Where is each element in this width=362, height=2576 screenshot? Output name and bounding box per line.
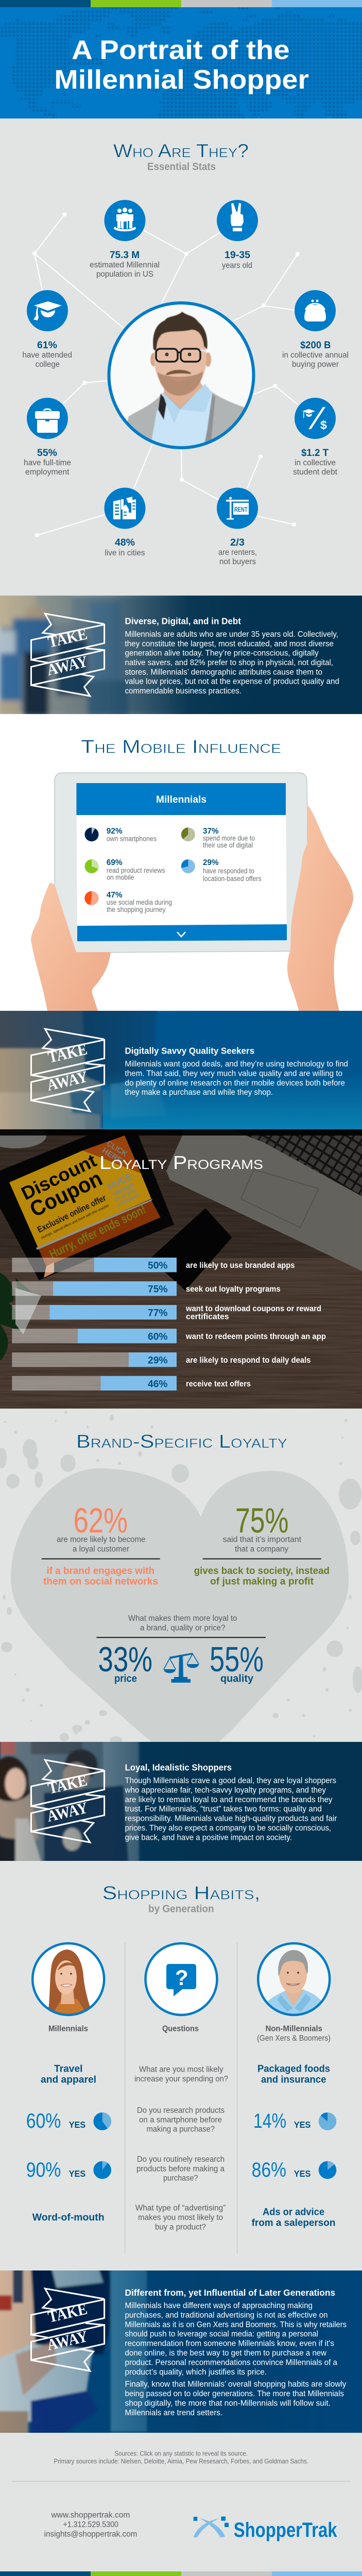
coupon tablet: savings, special offers and more with this voucher	[41, 1204, 110, 1240]
takeaway ribbon: AWAY	[45, 2327, 90, 2354]
stat: 75% gives back: that a company	[235, 1545, 288, 1554]
takeaway ribbon	[31, 2289, 105, 2371]
bar: 50%: 50%	[148, 1261, 168, 1272]
plant	[0, 1273, 33, 1360]
laptop	[166, 1129, 362, 1271]
heading: who are they	[113, 140, 249, 173]
bar: 60%: want to redeem points through an app	[185, 1332, 326, 1341]
contact details: insights@shoppertrak.com	[44, 2530, 137, 2538]
coupon tablet	[0, 1136, 174, 1280]
coupon tablet: on all your	[113, 1187, 138, 1203]
stat: 14% yes: YES	[294, 2120, 311, 2130]
stat: cities: live in cities	[105, 549, 145, 557]
stat: age: 19-35	[225, 250, 250, 261]
takeaway text: native savers, and 82% prefer to shop in physical, not digital,	[125, 658, 333, 667]
screen footer bar with chevron	[77, 924, 287, 941]
ears	[150, 352, 155, 367]
icon: balance scale	[164, 1653, 199, 1683]
takeaway text: Digitally Savvy Quality Seekers	[125, 1046, 254, 1056]
takeaway text: Millennials are adults who are under 35 years old. Collectively,	[125, 630, 338, 639]
mouse	[0, 1136, 46, 1148]
stat: 90% yes	[26, 2159, 111, 2181]
takeaway text: Millennials as it is on Gen Xers and Boomers. This is why retailers	[125, 2320, 347, 2329]
shirt	[151, 384, 213, 446]
wood desk	[0, 1129, 362, 1409]
takeaway text: Millennials want good deals, and they’re using technology to find	[125, 1060, 348, 1069]
panel: takeaway 1	[0, 590, 362, 716]
stat: population: 75.3 M	[110, 250, 140, 261]
stat: 62% social: are more likely to become	[57, 1535, 145, 1544]
pie: 69% reviews: read product reviews	[107, 867, 165, 874]
takeaway text: being passed on to older generations. The more that Millennials	[125, 2389, 344, 2398]
stat: 86% yes	[252, 2159, 336, 2181]
column: questions: buy a product?	[155, 2223, 206, 2231]
column: non-millennials: from a saleperson	[252, 2217, 335, 2229]
coupon tablet: Exclusive online offer	[36, 1193, 108, 1235]
pie: 47% social media: use social media during	[107, 899, 172, 906]
face	[153, 329, 207, 385]
stat: 14% yes: 14%	[253, 2110, 286, 2132]
photo: young woman	[32, 1943, 104, 2017]
icon: cap over dollar: $	[320, 418, 327, 432]
bar: 75%: 75%	[148, 1284, 168, 1295]
takeaway ribbon: AWAY	[45, 1799, 90, 1825]
heading	[102, 1883, 261, 1915]
comparison: quality vs price: quality	[220, 1673, 254, 1684]
stat: 62% social: a loyal customer	[73, 1545, 129, 1554]
takeaway ribbon: AWAY	[45, 652, 90, 679]
takeaway text: Loyal, Idealistic Shoppers	[125, 1762, 232, 1773]
bar: 29%: 29%	[148, 1355, 168, 1366]
photo: millennial man portrait	[109, 303, 255, 453]
heading: by Generation	[148, 1904, 214, 1915]
tablet	[55, 773, 309, 953]
takeaway text: recommendation from someone Millennials know, even if it’s	[125, 2340, 334, 2348]
column: questions: makes you most likely to	[138, 2213, 223, 2222]
top colour bar	[0, 0, 362, 7]
bar: 60%	[12, 1329, 326, 1343]
icon: question bubble	[166, 1964, 196, 1996]
bar: 29%: are likely to respond to daily deals	[186, 1356, 311, 1365]
hair	[153, 312, 208, 351]
column: millennials: Travel	[54, 2063, 82, 2075]
icon: people	[114, 208, 136, 231]
panel: shopping habits	[26, 1883, 336, 2253]
panel: takeaway 3	[0, 1739, 362, 1862]
stat: renters: not buyers	[219, 557, 256, 566]
stat: buying power	[282, 290, 349, 369]
stat: 75% gives back	[194, 1501, 330, 1587]
stat: 90% yes: 90%	[26, 2159, 61, 2181]
takeaway text: they make a purchase and while they shop.	[125, 1088, 273, 1097]
pie: 69% reviews: on mobile	[107, 874, 134, 882]
coupon tablet: CLICK	[105, 1139, 129, 1159]
tablet: Millennials	[156, 794, 206, 805]
takeaway text: shop digitally, the more that non-Millennials will follow suit.	[125, 2399, 331, 2408]
stat: 14% yes	[253, 2110, 336, 2132]
logo: ShopperTrak: ShopperTrak	[234, 2519, 337, 2541]
bar: 60%: 60%	[148, 1332, 168, 1343]
column: questions: making a purchase?	[147, 2125, 215, 2134]
stat: age: years old	[222, 261, 252, 270]
pie: 92% own smartphones: 92%	[107, 827, 123, 836]
takeaway ribbon: TAKE	[46, 1040, 89, 1066]
stat: 75% gives back: said that it’s important	[223, 1535, 302, 1544]
stat: 60% yes	[26, 2110, 111, 2132]
contact details	[44, 2511, 137, 2538]
coupon tablet: purchases!	[116, 1192, 141, 1208]
stat: student debt: $1.2 T	[301, 448, 329, 459]
bar: 77%: want to download coupons or reward	[185, 1304, 321, 1313]
stat: age	[217, 200, 258, 270]
column dividers	[125, 1942, 237, 2253]
stat: student debt: student debt	[293, 468, 338, 477]
takeaway ribbon: AWAY	[45, 1067, 90, 1094]
stat: renters	[217, 487, 258, 566]
takeaway ribbon: TAKE	[46, 2299, 89, 2326]
heading: Loyalty Programs	[99, 1152, 263, 1173]
stat: 75% gives back: gives back to society, instead	[194, 1565, 330, 1577]
pie: 69% reviews	[84, 858, 165, 882]
coupon tablet: Hurry, offer ends soon!	[47, 1202, 148, 1261]
stat: employment: have full-time	[24, 459, 71, 467]
bar: 75%	[12, 1281, 281, 1296]
coupon tablet: HERE!	[100, 1146, 126, 1167]
comparison: quality vs price: 33%	[98, 1640, 152, 1679]
takeaway ribbon	[31, 614, 105, 696]
icon: question bubble: ?	[175, 1965, 188, 1990]
pie: 37% spend more: 37%	[203, 827, 218, 836]
takeaway ribbon: TAKE	[46, 1771, 89, 1798]
takeaway ribbon	[31, 1760, 105, 1842]
takeaway text: should push to leverage social media: getting a personal	[125, 2330, 318, 2338]
bar: 75%: seek out loyalty programs	[186, 1285, 281, 1294]
sources: Primary sources include: Nielsen, Deloitte, Aimia, Pew Resesarch, Forbes, and Goldman Sachs.	[54, 2458, 308, 2465]
stat: 62% social: if a brand engages with	[46, 1565, 154, 1577]
title: A Portrait of the	[72, 35, 290, 65]
pie: 47% social media: the shopping journey	[107, 906, 166, 913]
stat: renters: 2/3	[230, 537, 245, 548]
takeaway text: do plenty of online research on their mobile devices both before	[125, 1079, 345, 1088]
heading: Brand-Specific Loyalty	[76, 1431, 287, 1452]
stat: renters: are renters,	[218, 548, 257, 557]
title: Millennial Shopper	[54, 65, 309, 95]
icon: peace hand	[231, 203, 244, 231]
column: questions: on a smartphone before	[139, 2115, 222, 2124]
heading: The Mobile Influence	[81, 736, 281, 757]
stat: population: population in US	[96, 270, 153, 279]
panel: takeaway 2	[0, 1007, 362, 1133]
stat: 90% yes: YES	[69, 2168, 85, 2179]
column: questions: Questions	[162, 2025, 199, 2033]
column: non-millennials: Non-Millennials	[266, 2025, 322, 2033]
takeaway text: give back, and have a positive impact on society.	[125, 1833, 292, 1842]
icon: briefcase	[35, 408, 60, 433]
takeaway text: commendable business practices.	[125, 687, 242, 696]
stat: buying power: $200 B	[300, 340, 331, 351]
takeaway text: who appreciate fair, tech-savvy loyalty programs, and they	[125, 1786, 326, 1794]
comparison: quality vs price	[96, 1614, 266, 1684]
takeaway text: stores. Millennials’ demographic attributes cause them to	[125, 668, 322, 677]
stat: student debt	[293, 398, 338, 477]
icon: cap over dollar	[302, 407, 327, 432]
stat: 60% yes: 60%	[26, 2110, 61, 2132]
bar: 77%	[12, 1304, 321, 1321]
column: questions: What type of “advertising”	[135, 2204, 226, 2213]
column: questions: What are you most likely	[139, 2065, 223, 2074]
takeaway text: product’s quality, which justifies its price.	[125, 2368, 267, 2377]
takeaway text: Different from, yet Influential of Later Generations	[125, 2287, 335, 2298]
stat: 75% gives back: 75%	[235, 1501, 288, 1540]
pie: 37% spend more	[181, 827, 255, 849]
takeaway text	[125, 1046, 348, 1097]
coupon tablet: Coupon	[26, 1166, 106, 1222]
pie: 47% social media	[84, 891, 172, 913]
takeaway ribbon: TAKE	[46, 624, 89, 651]
bar: 50%: are likely to use branded apps	[186, 1261, 295, 1270]
pie: 37% spend more: their use of digital	[203, 841, 253, 849]
bar: 29%	[12, 1352, 311, 1367]
stat: student debt: in collective	[295, 459, 336, 467]
heart splatter	[0, 1411, 362, 1744]
contact details: +1.312.529.5300	[63, 2520, 118, 2529]
bottom colour bar	[0, 2571, 362, 2576]
takeaway text: done online, is the best way to get them to purchase a new	[125, 2349, 327, 2358]
left hand	[31, 883, 111, 1011]
takeaway text: product. Personal recommendations convince Millennials of a	[125, 2358, 337, 2367]
column: millennials	[26, 1943, 111, 2223]
stat: college	[23, 290, 72, 369]
takeaway text: Though Millennials crave a good deal, they are loyal shoppers	[125, 1776, 336, 1785]
stat: employment: employment	[25, 468, 70, 477]
stat: population: estimated Millennial	[90, 261, 160, 269]
bar: 77%: certificates	[186, 1313, 229, 1321]
heading: Shopping Habits,	[102, 1883, 261, 1904]
bar: 77%: 77%	[148, 1308, 168, 1319]
stat: 62% social	[42, 1501, 160, 1587]
stat: employment	[24, 398, 71, 477]
pie: 92% own smartphones: own smartphones	[107, 835, 157, 843]
takeaway text: they constitute the largest, most educated, and most diverse	[125, 639, 334, 648]
title	[54, 35, 309, 95]
stat: 86% yes: 86%	[252, 2159, 286, 2181]
comparison: quality vs price: a brand, quality or price?	[140, 1623, 226, 1632]
stat: 75% gives back: of just making a profit	[210, 1576, 314, 1587]
icon: rent sign	[226, 497, 249, 519]
takeaway text: Millennials are trend setters.	[125, 2409, 222, 2417]
pie: 29% location offers: location-based offers	[203, 875, 262, 883]
neck	[164, 379, 203, 408]
icon: graduation cap	[33, 301, 62, 320]
panel: brand-specific loyalty	[0, 1411, 362, 1744]
stat: 62% social: 62%	[73, 1501, 128, 1540]
icon: rent sign: RENT	[234, 505, 248, 513]
stat: buying power: buying power	[292, 360, 339, 369]
right hand	[287, 805, 353, 1011]
takeaway text: generation alive today. They’re price-conscious, digitally	[125, 649, 319, 658]
column: questions: purchase?	[163, 2174, 198, 2183]
panel: loyalty programs	[0, 1124, 362, 1409]
takeaway text: responsibility. Millennials value high-quality products and fair	[125, 1815, 337, 1823]
stat: 62% social: them on social networks	[43, 1576, 158, 1587]
takeaway text	[125, 1762, 337, 1842]
bar: 46%: 46%	[148, 1379, 168, 1389]
beard	[158, 371, 203, 396]
takeaway text: Millennials have different ways of approaching making	[125, 2301, 313, 2310]
column: millennials: Word-of-mouth	[32, 2212, 105, 2223]
stat: employment: 55%	[37, 448, 57, 459]
takeaway text	[125, 616, 339, 696]
comparison: quality vs price: 55%	[210, 1640, 264, 1679]
sources	[12, 2450, 351, 2482]
heading: who are they: Who Are They?	[113, 140, 249, 161]
column: millennials: and apparel	[41, 2074, 96, 2086]
column: questions: Do you routinely research	[137, 2155, 225, 2164]
connector network	[32, 212, 300, 537]
takeaway text: value low prices, but not at the expense of product quality and	[125, 677, 339, 686]
pie: 47% social media: 47%	[107, 891, 123, 900]
takeaway text: Finally, know that Millennials’ overall shopping habits are slowly	[125, 2380, 347, 2389]
coupon tablet: HUGE	[106, 1172, 134, 1192]
bar: 46%	[12, 1376, 251, 1391]
comparison: quality vs price: price	[114, 1673, 137, 1684]
sources: Sources: Click on any statistic to reveal its source.	[114, 2450, 248, 2458]
pie: 29% location offers: 29%	[203, 858, 218, 867]
glasses	[156, 349, 206, 362]
icon: city buildings	[113, 497, 136, 519]
stat: college: have attended	[23, 351, 72, 360]
dotted world map	[0, 6, 362, 120]
panel: takeaway 4	[0, 2267, 362, 2434]
column: non-millennials: Packaged foods	[257, 2063, 330, 2075]
pie: 37% spend more: spend more due to	[203, 835, 255, 842]
column: non-millennials: Ads or advice	[263, 2206, 324, 2217]
takeaway text: prices. They also expect a company to be socially conscious,	[125, 1824, 331, 1833]
stat: college: college	[36, 360, 60, 369]
bar: 46%: receive text offers	[186, 1380, 251, 1388]
stat: population	[90, 200, 160, 279]
stat: 60% yes: YES	[69, 2120, 85, 2130]
stat: college: 61%	[37, 340, 57, 351]
takeaway text: purchases, and traditional advertising is not as effective on	[125, 2311, 327, 2319]
phone	[150, 1208, 232, 1291]
stat: buying power: in collective annual	[282, 351, 349, 360]
pie: 69% reviews: 69%	[107, 858, 123, 867]
cardigan	[127, 392, 245, 442]
column: questions: Do you research products	[137, 2106, 225, 2115]
photo: older man	[258, 1943, 330, 2017]
logo: ShopperTrak	[194, 2516, 337, 2541]
column: non-millennials	[252, 1943, 336, 2229]
column: millennials: Millennials	[48, 2025, 88, 2033]
pie: 29% location offers: have responded to	[203, 867, 254, 875]
pie: 29% location offers	[181, 858, 262, 883]
stat: cities: 48%	[115, 537, 135, 548]
screen header	[76, 783, 286, 815]
column: questions: products before making a	[136, 2164, 225, 2173]
takeaway ribbon	[31, 1029, 105, 1111]
coupon tablet: savings	[110, 1180, 135, 1198]
icon: coin purse	[304, 300, 326, 321]
panel: hero header	[0, 6, 362, 120]
pie: 92% own smartphones	[84, 827, 157, 843]
heading: who are they: Essential Stats	[147, 161, 216, 173]
takeaway text: trust. For Millennials, “trust” takes two forms: quality and	[125, 1805, 322, 1814]
contact details: www.shoppertrak.com	[50, 2511, 130, 2520]
column: questions: increase your spending on?	[134, 2075, 228, 2083]
takeaway text: them. That said, they very much value quality and are willing to	[125, 1069, 342, 1078]
column: non-millennials: and insurance	[261, 2074, 326, 2086]
takeaway text	[125, 2287, 347, 2417]
bar: 50%	[12, 1258, 295, 1272]
takeaway text: Diverse, Digital, and in Debt	[125, 616, 241, 626]
column: non-millennials: (Gen Xers & Boomers)	[257, 2034, 331, 2043]
stat: cities	[104, 487, 145, 557]
takeaway text: are likely to remain loyal to and recommend the brands they	[125, 1795, 333, 1804]
coupon tablet: Discount	[18, 1150, 100, 1204]
stat: 86% yes: YES	[294, 2168, 311, 2179]
column: questions	[134, 1943, 228, 2231]
comparison: quality vs price: What makes them more loyal to	[128, 1614, 237, 1623]
panel: mobile influence	[0, 714, 362, 1011]
